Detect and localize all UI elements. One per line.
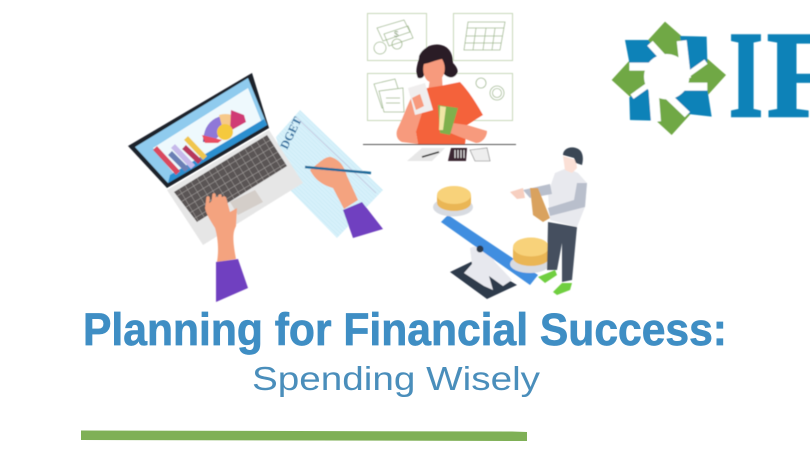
icon: banknotes and coins: $	[394, 30, 399, 39]
keyboard	[174, 135, 287, 222]
bar chart on screen	[155, 138, 205, 173]
scale support	[464, 243, 512, 290]
icon: receipts	[374, 79, 404, 112]
illustration: woman reviewing finances	[363, 14, 516, 161]
laptop base	[167, 130, 303, 245]
left pan with coins	[433, 186, 473, 216]
icon: calendar	[464, 22, 505, 50]
logo letters: I	[729, 6, 763, 143]
pen	[305, 167, 371, 173]
scale base	[450, 260, 517, 299]
illustration: man with balance scale	[433, 147, 587, 299]
illustration: laptop and budget sheet	[128, 73, 383, 302]
green divider bar	[81, 430, 527, 441]
left sleeve	[216, 259, 248, 302]
laptop screen	[128, 73, 269, 188]
budget paper	[276, 110, 383, 238]
icon frames	[368, 14, 512, 120]
budget paper: DGET	[277, 115, 305, 151]
man figure	[510, 147, 587, 295]
donut chart on screen	[202, 110, 246, 143]
right sleeve	[343, 202, 383, 238]
scale beam	[441, 215, 538, 285]
left hand	[205, 195, 237, 262]
right pan with coins	[510, 238, 550, 273]
table line	[363, 144, 516, 146]
title: Planning for Financial Success:	[83, 304, 727, 355]
woman figure	[397, 44, 487, 144]
subtitle: Spending Wisely	[252, 360, 541, 397]
logo: IF brand	[612, 6, 810, 143]
logo letters	[729, 6, 810, 143]
trackpad	[230, 190, 263, 215]
desk items	[407, 148, 490, 161]
icon: banknotes and coins	[374, 20, 413, 54]
icon: clock coins	[476, 78, 504, 100]
right hand	[310, 157, 358, 209]
logo mark	[612, 22, 726, 135]
